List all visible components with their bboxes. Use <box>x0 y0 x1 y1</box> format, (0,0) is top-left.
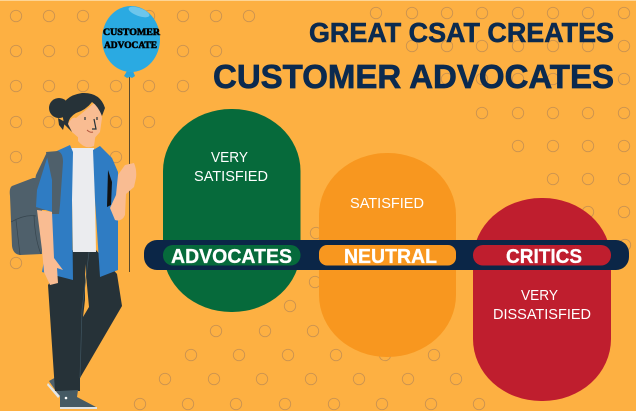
denim jacket <box>36 145 118 280</box>
backpack <box>10 152 52 255</box>
face <box>68 100 102 141</box>
forearm and hand <box>110 163 136 220</box>
eyes and nose <box>85 117 97 129</box>
very satisfied label: SATISFIED <box>194 168 268 185</box>
very satisfied label <box>194 149 268 185</box>
balloon label <box>103 28 160 51</box>
advocates pill: ADVOCATES <box>171 246 292 268</box>
title: CUSTOMER ADVOCATES <box>213 58 614 95</box>
neck <box>78 125 96 147</box>
very dissatisfied label <box>493 287 591 323</box>
backpack strap over jacket <box>46 151 63 214</box>
balloon <box>102 4 160 272</box>
neutral pill: NEUTRAL <box>344 246 437 268</box>
critics pill: CRITICS <box>506 246 582 268</box>
rear shoe <box>49 376 66 397</box>
trousers <box>48 250 122 391</box>
balloon label: ADVOCATE <box>104 41 157 51</box>
very dissatisfied label: VERY <box>521 287 558 304</box>
critics pill <box>473 245 611 268</box>
balloon label: CUSTOMER <box>103 28 160 38</box>
neutral pill <box>319 245 456 268</box>
satisfied label: SATISFIED <box>350 195 424 212</box>
very dissatisfied label: DISSATISFIED <box>493 306 591 323</box>
category bar <box>144 240 629 270</box>
panel: very dissatisfied column <box>473 198 611 401</box>
front shoe <box>60 390 96 408</box>
title <box>213 17 614 95</box>
hair <box>49 93 105 132</box>
white t-shirt <box>71 148 96 252</box>
panel: satisfied column <box>319 153 456 357</box>
person illustration <box>10 93 136 409</box>
panel: very satisfied column <box>163 109 300 312</box>
left arm and hand <box>37 210 63 285</box>
title: GREAT CSAT CREATES <box>309 17 614 48</box>
very satisfied label: VERY <box>211 149 248 166</box>
